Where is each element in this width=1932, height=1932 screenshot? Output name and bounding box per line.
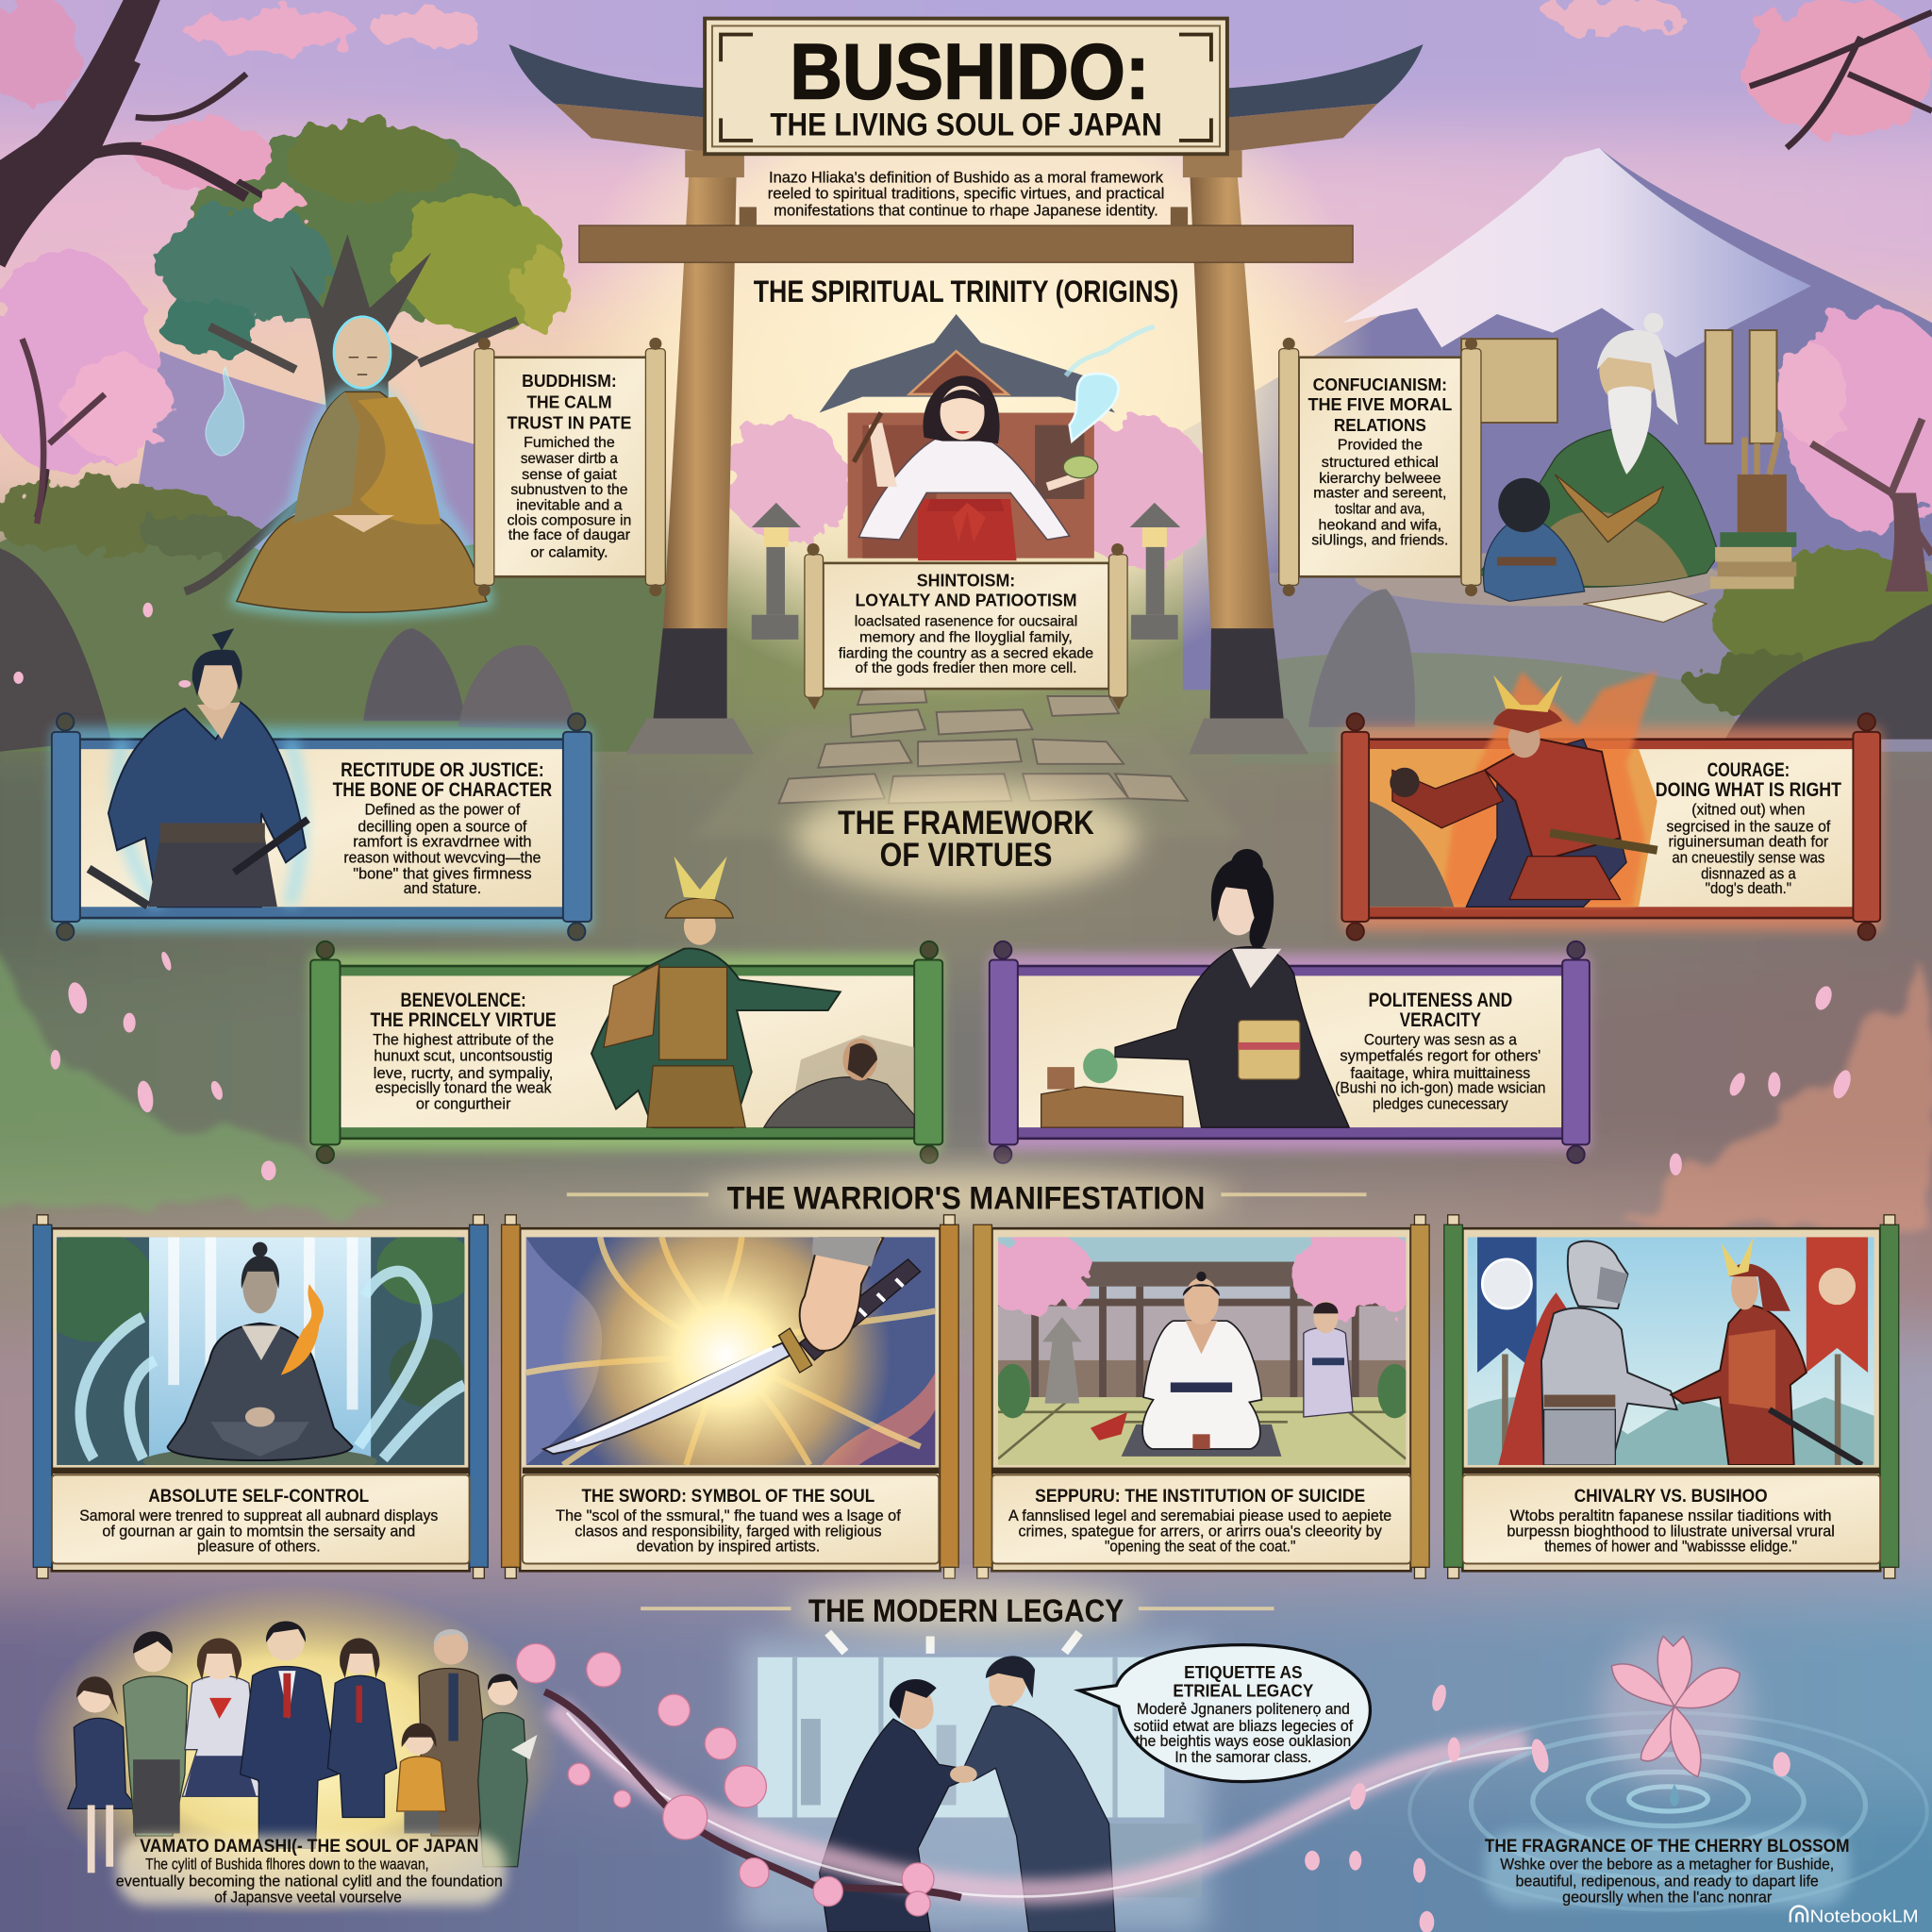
books and pen pot — [1710, 432, 1796, 589]
Buddhism body: inevitable and a — [516, 498, 623, 514]
card text: of gournan ar gain to momtsin the sersaity and — [102, 1524, 415, 1541]
pillar bases — [653, 628, 727, 721]
schoolgirl with bag — [68, 1676, 138, 1873]
branch — [544, 1691, 961, 1897]
samurai in blue — [89, 628, 308, 907]
Shintoism body: loaclsated rasenence for oucsairal — [855, 614, 1077, 630]
scroll rods — [310, 941, 942, 1163]
intro text: monifestations that continue to rhape Japanese identity. — [774, 202, 1158, 220]
panel: absolute self-control card — [32, 1215, 488, 1578]
illustration: glowing sword — [526, 1237, 936, 1465]
card text: crimes, spategue for arrers, or arirrs oua's cleeority by — [1019, 1524, 1383, 1541]
scroll rods — [52, 713, 591, 941]
courage body: riguinersuman death for — [1668, 832, 1829, 850]
Buddhism body — [507, 435, 631, 560]
blossoms — [516, 1643, 934, 1916]
crossbar — [579, 225, 1353, 262]
benevolence heading: THE PRINCELY VIRTUE — [370, 1009, 557, 1031]
landscape: mountains, hills and ground — [0, 148, 1932, 838]
politeness heading — [1368, 990, 1512, 1031]
card text — [1008, 1507, 1391, 1555]
card text — [1507, 1507, 1835, 1555]
cherry trees beside shrine — [727, 419, 1214, 567]
politeness body: (Bushi no ich-gon) made wsician — [1335, 1079, 1546, 1097]
shrine and miko figure — [727, 314, 1214, 640]
bubble text: Moderẻ Jgnaners politenerọ and — [1137, 1701, 1350, 1718]
benevolence body — [373, 1031, 554, 1113]
boy with notebook — [478, 1674, 537, 1867]
heading: framework of virtues: OF VIRTUES — [880, 837, 1052, 874]
bubble text: In the samorar class. — [1174, 1749, 1311, 1766]
speech bubble: etiquette — [1079, 1645, 1370, 1782]
card text — [79, 1507, 438, 1555]
scene: samurai aiding wounded man — [591, 857, 914, 1127]
rectitude body — [343, 800, 541, 897]
bubble text: sotiid etwat are bliazs legecies of — [1134, 1718, 1354, 1735]
Shintoism body: of the gods fredier then more cell. — [855, 660, 1077, 676]
illustration: knight and samurai handshake — [1468, 1237, 1874, 1465]
subtitle: THE LIVING SOUL OF JAPAN — [770, 108, 1162, 143]
bushes — [0, 483, 1932, 716]
falling petals — [13, 603, 1854, 1180]
panel: politeness scroll — [990, 849, 1590, 1163]
Buddhism scroll — [475, 338, 665, 596]
student — [1484, 515, 1585, 601]
monk figure with blue aura — [206, 317, 487, 612]
rocks — [0, 548, 111, 752]
bubble heading: ETIQUETTE AS — [1184, 1662, 1303, 1682]
torii gate — [508, 44, 1424, 754]
heading: framework of virtues: THE FRAMEWORK — [838, 805, 1094, 841]
courage heading — [1656, 759, 1841, 801]
Fragrance caption — [1485, 1830, 1849, 1907]
Shintoism heading — [855, 571, 1077, 610]
courage heading: COURAGE: — [1707, 759, 1790, 781]
heading: warrior's manifestation: THE WARRIOR'S MANIFESTATION — [727, 1180, 1205, 1216]
modern office scene — [740, 1633, 1208, 1932]
card text: burpessn bioghthood to lilustrate universal vrural — [1507, 1524, 1835, 1541]
heading: warrior's manifestation — [567, 1170, 1366, 1224]
benevolence body: leve, rucrty, and sympaliy, — [374, 1064, 553, 1082]
politeness body: sympetfalés regort for others' — [1340, 1047, 1541, 1065]
icon: Mount Fuji — [1183, 148, 1932, 690]
icon: blue spirit — [1066, 326, 1155, 441]
Buddhism body: sewaser dirtb a — [521, 451, 618, 467]
card text: "opening the seat of the coat." — [1105, 1538, 1296, 1555]
scroll rods — [1341, 713, 1880, 941]
politeness heading: VERACITY — [1400, 1009, 1481, 1031]
card text: Samoral were trenred to suppreat all aubnard displays — [79, 1507, 438, 1524]
card text — [556, 1507, 901, 1555]
Shintoism heading: SHINTOISM: — [917, 571, 1015, 591]
bubble heading: ETRIEAL LEGACY — [1173, 1681, 1313, 1701]
card text: The "scol of the ssmural," fhe tuand wes a lsage of — [556, 1507, 901, 1524]
courage body: "dog's death." — [1706, 879, 1791, 897]
card text: themes of hower and "wabissse elidge." — [1544, 1538, 1797, 1555]
man in navy suit — [241, 1622, 338, 1848]
Fragrance caption: geourslly when the l'anc nonrar — [1562, 1889, 1773, 1907]
card title: CHIVALRY VS. BUSIHOO — [1574, 1486, 1768, 1507]
benevolence body: or congurtheir — [416, 1095, 511, 1113]
panel: sword card — [502, 1189, 958, 1578]
benevolence body: The highest attribute of the — [373, 1031, 554, 1049]
Confucianism scroll — [1279, 338, 1481, 596]
green tree — [160, 121, 569, 591]
card text: clasos and responsibility, farged with religious — [575, 1524, 882, 1541]
Yamato Damashii caption: The cylitl of Bushida flhores down to the waavan, — [145, 1855, 429, 1873]
Shintoism body: memory and fhe lloyglial family, — [859, 629, 1073, 645]
benevolence heading — [370, 990, 557, 1031]
Confucianism heading: RELATIONS — [1334, 415, 1426, 435]
Confucianism heading: THE FIVE MORAL — [1307, 394, 1452, 414]
Yamato Damashii caption: eventually becoming the national cylitl and the foundation — [116, 1873, 503, 1890]
Confucianism body: kierarchy belweee — [1319, 471, 1441, 487]
benevolence body: especislly tonard the weak — [375, 1079, 552, 1097]
courage body: disnnazed as a — [1701, 864, 1796, 882]
card title: ABSOLUTE SELF-CONTROL — [148, 1486, 369, 1507]
Confucian teacher and student — [1461, 313, 1796, 623]
courage body: (xitned out) when — [1691, 800, 1805, 818]
Shintoism heading: LOYALTY AND PATIOOTISM — [855, 591, 1077, 610]
heading: framework of virtues — [793, 782, 1139, 893]
card text: pleasure of others. — [197, 1538, 321, 1555]
sailor uniform girl — [182, 1638, 265, 1796]
Buddhism heading — [507, 371, 631, 433]
Yamato Damashii caption — [116, 1836, 506, 1907]
courage body: segrcised in the sauze of — [1667, 818, 1830, 836]
Confucianism body: Provided the — [1338, 438, 1423, 454]
mist clouds and petals — [0, 603, 1932, 1232]
right man — [963, 1706, 1115, 1932]
courage heading: DOING WHAT IS RIGHT — [1656, 779, 1841, 801]
politeness heading: POLITENESS AND — [1368, 990, 1512, 1011]
stone lanterns — [752, 503, 1180, 640]
Buddhism body: the face of daugar — [508, 527, 630, 543]
Buddhism body: subnustven to the — [510, 482, 628, 498]
Buddhism body: clois composure in — [507, 512, 631, 528]
water ripples — [1409, 1713, 1927, 1909]
Buddhism heading: BUDDHISM: — [522, 371, 617, 391]
illustration: waterfall meditation — [57, 1237, 464, 1465]
politeness body: Courtery was sesn as a — [1364, 1031, 1517, 1049]
panel: rectitude scroll — [52, 628, 591, 941]
courage body: an cneuestily sense was — [1672, 848, 1824, 866]
caption box — [523, 1474, 939, 1563]
Yamato Damashii caption: VAMATO DAMASHI(- THE SOUL OF JAPAN — [140, 1836, 478, 1857]
Confucianism body: master and sereent, — [1313, 486, 1446, 502]
card title: THE SWORD: SYMBOL OF THE SOUL — [581, 1486, 874, 1507]
scroll rods — [990, 941, 1590, 1163]
panel: benevolence scroll — [310, 857, 942, 1163]
Confucianism body: heokand and wifa, — [1319, 518, 1441, 534]
icon: blue flame — [206, 367, 244, 456]
samurai in red armour — [1390, 675, 1657, 907]
flowing ribbon and cherry branch — [516, 1643, 1541, 1916]
Buddhism heading: TRUST IN PATE — [507, 413, 631, 433]
NotebookLM watermark: NotebookLM — [1810, 1907, 1919, 1926]
woman in suit — [327, 1638, 397, 1818]
rectitude body: decilling open a source of — [358, 818, 527, 836]
Fragrance caption: Wshke over the bebore as a metagher for Bushide, — [1500, 1855, 1834, 1873]
courage body — [1667, 800, 1830, 897]
cherry blossoms left — [0, 0, 480, 524]
Buddhism heading: THE CALM — [526, 391, 611, 411]
Confucianism heading — [1307, 375, 1452, 435]
cherry blossoms right — [1546, 0, 1932, 591]
rectitude body: ramfort is exravdrnee with — [353, 832, 532, 850]
roof — [508, 44, 1424, 153]
politeness body — [1335, 1031, 1546, 1113]
illustration: courtyard ritual — [998, 1237, 1406, 1465]
caption box — [1462, 1474, 1880, 1563]
Confucianism body — [1311, 438, 1448, 548]
title plaque — [705, 19, 1227, 154]
intro text: Inazo Hliaka's definition of Bushido as a moral framework — [769, 168, 1163, 186]
small child — [397, 1724, 446, 1834]
politeness body: pledges cunecessary — [1373, 1095, 1508, 1113]
rectitude heading: RECTITUDE OR JUSTICE: — [341, 759, 544, 781]
bowing businessmen — [820, 1654, 1115, 1932]
stone path — [690, 688, 1244, 838]
rectitude heading — [333, 759, 552, 801]
icon: cherry blossom over water — [1598, 1634, 1751, 1807]
fire background — [1369, 749, 1657, 907]
geisha pouring tea — [1041, 849, 1349, 1127]
teacher — [1478, 425, 1719, 587]
Confucianism body: tosltar and ava, — [1335, 502, 1425, 518]
panel: courage scroll — [1341, 672, 1881, 941]
card text: Wtobs peraltitn fapanese nssilar tiaditions with — [1510, 1507, 1832, 1524]
caption box — [991, 1474, 1411, 1563]
bubble text: the beightis ways eose ouklasion — [1136, 1733, 1351, 1750]
Confucianism body: siUlings, and friends. — [1311, 532, 1448, 548]
rectitude body: "bone" that gives firmness — [353, 864, 532, 882]
rectitude body: and stature. — [404, 879, 481, 897]
scattered blue-side petals — [1305, 1683, 1790, 1932]
young man in green sweater — [124, 1631, 188, 1836]
trees: cherry blossoms and great green tree — [0, 0, 1932, 591]
Shintoism body: fiarding the country as a secred ekade — [839, 645, 1093, 661]
Confucianism heading: CONFUCIANISM: — [1313, 375, 1447, 394]
miko — [854, 375, 1098, 560]
Yamato Damashii caption: of Japansve veetal vourselve — [214, 1889, 402, 1907]
bubble heading — [1173, 1662, 1313, 1701]
Buddhism body: Fumiched the — [524, 435, 615, 451]
heading: spiritual trinity: THE SPIRITUAL TRINITY (ORIGINS) — [754, 274, 1178, 308]
Buddhism body: or calamity. — [530, 544, 608, 560]
heading: modern legacy: THE MODERN LEGACY — [808, 1593, 1124, 1629]
Fragrance caption: THE FRAGRANCE OF THE CHERRY BLOSSOM — [1485, 1836, 1849, 1857]
Fragrance caption: beautiful, redipenous, and ready to dapart life — [1516, 1873, 1819, 1890]
Shintoism body — [839, 614, 1093, 676]
panel: chivalry card — [1444, 1215, 1899, 1578]
card title: SEPPURU: THE INSTITUTION OF SUICIDE — [1035, 1486, 1365, 1507]
older man — [419, 1629, 488, 1836]
pillars — [663, 156, 737, 635]
rectitude body: Defined as the power of — [365, 800, 520, 818]
main title: BUSHIDO: — [790, 26, 1150, 115]
intro text — [768, 168, 1164, 220]
card text: A fannslised legel and seremabiai piease used to aepiete — [1008, 1507, 1391, 1524]
intro text: reeled to spiritual traditions, specific virtues, and practical — [768, 184, 1164, 202]
benevolence body: hunuxt scut, uncontsoustig — [374, 1047, 553, 1065]
torii glow — [559, 12, 1373, 702]
politeness body: faaitage, whira muittainess — [1351, 1064, 1530, 1082]
wall scrolls — [1461, 330, 1776, 443]
caption box — [52, 1474, 470, 1563]
Confucianism body: structured ethical — [1322, 455, 1439, 471]
card text: devation by inspired artists. — [637, 1538, 820, 1555]
rectitude body: reason without wevcving—the — [343, 848, 541, 866]
Yamato Damashii family group — [31, 1583, 560, 1916]
bubble text — [1134, 1701, 1354, 1766]
heading: modern legacy — [641, 1585, 1274, 1634]
Buddhism body: sense of gaiat — [522, 467, 617, 483]
panel: seppuku card — [971, 1215, 1429, 1578]
Shintoism scroll — [805, 543, 1127, 709]
handshake — [950, 1766, 977, 1783]
left man — [820, 1719, 963, 1932]
benevolence heading: BENEVOLENCE: — [400, 990, 526, 1011]
rectitude heading: THE BONE OF CHARACTER — [333, 779, 552, 801]
shrine — [820, 314, 1115, 558]
